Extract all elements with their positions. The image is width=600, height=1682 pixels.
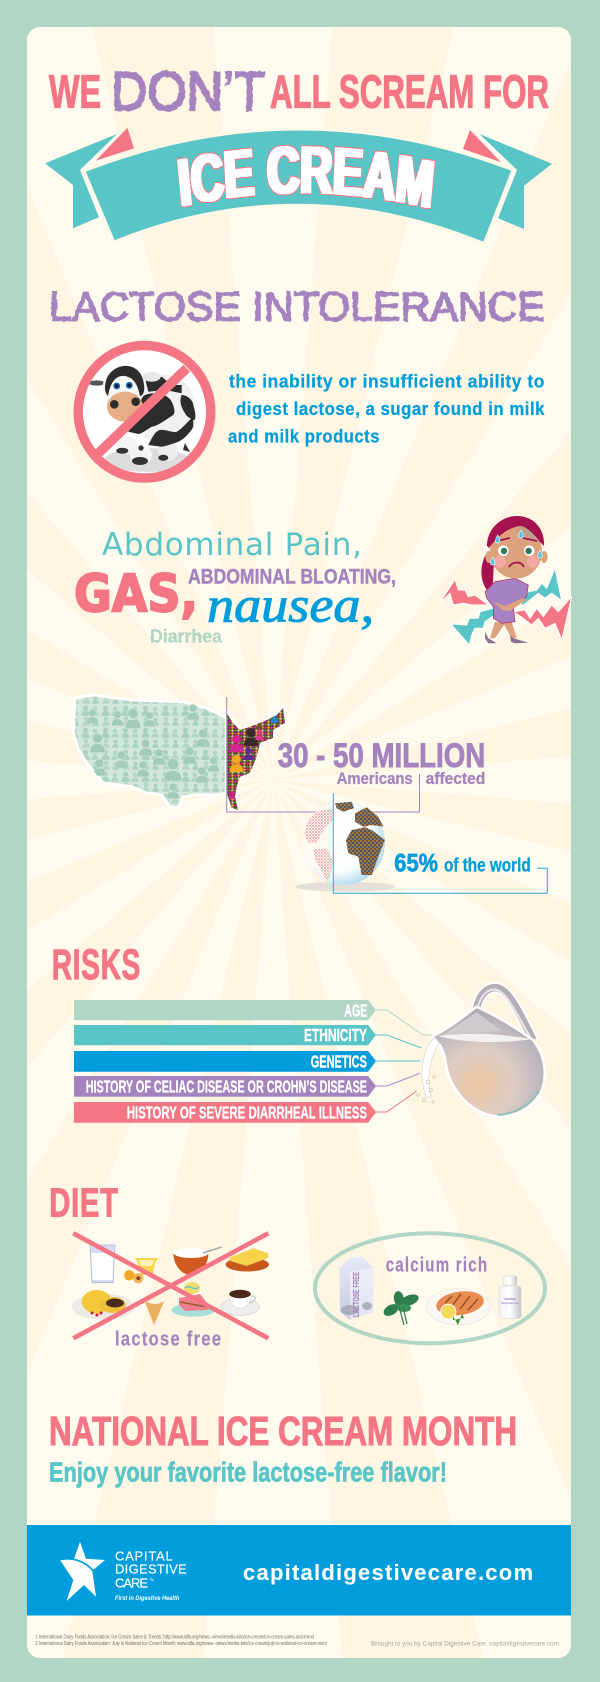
symptom: gas: GAS,	[74, 565, 198, 625]
map divider bracket	[227, 697, 420, 812]
definition line 1: the inability or insufficient ability to	[229, 370, 545, 391]
ribbon right tail	[480, 134, 552, 229]
jug base tint	[498, 1091, 539, 1115]
definition line 3: and milk products	[228, 425, 380, 446]
panel: calcium rich foods	[315, 1233, 545, 1343]
globe sphere	[302, 802, 385, 885]
pain zigzag: right pink	[513, 597, 572, 640]
brought to you by credit: Brought to you by Capital Digestive Care, capitaldigestivecare.com	[371, 1641, 559, 1648]
bar: severe diarrheal illness: HISTORY OF SEVERE DIARRHEAL ILLNESS	[127, 1103, 367, 1123]
heading: lactose intolerance: LACTOSE INTOLERANCE	[49, 284, 545, 330]
sweat drops	[490, 530, 542, 565]
legs	[490, 622, 517, 638]
europe and africa	[335, 802, 385, 875]
ribbon right fold	[463, 130, 501, 162]
food: lactose-free milk carton: LACTOSE FREE	[351, 1272, 361, 1317]
title word: we: WE	[49, 65, 101, 117]
symptom: abdominal bloating: ABDOMINAL BLOATING,	[188, 564, 396, 588]
bar: celiac or crohn's: HISTORY OF CELIAC DISEASE OR CROHN’S DISEASE	[86, 1077, 367, 1097]
subheading: enjoy your favorite flavor: Enjoy your favorite lactose-free flavor!	[49, 1457, 447, 1488]
shoes	[485, 632, 528, 643]
heading: diet: DIET	[49, 1180, 119, 1226]
symptom: abdominal pain: Abdominal Pain,	[102, 527, 362, 563]
title: we don't all scream for	[49, 60, 549, 122]
bar: age: AGE	[344, 1001, 367, 1021]
face	[490, 526, 542, 578]
bar: genetics	[74, 1051, 376, 1072]
food: waffle plate	[72, 1290, 135, 1320]
footnote 1: 1 International Dairy Foods Association: Ice Cream Sales & Trends; http://www.idfa.org/news--views/media-kits/ice-cream/ice-cream-sales-and-trend	[35, 1634, 314, 1640]
ribbon text: ICE CREAM	[176, 144, 436, 209]
food: cottage cheese bowl	[173, 1247, 222, 1275]
ears	[485, 551, 548, 563]
pain zigzag: left pink	[439, 579, 488, 605]
label: calcium rich: calcium rich	[386, 1255, 488, 1277]
icon: no cow sign	[78, 346, 211, 478]
cheeks	[494, 556, 506, 568]
ribbon left tail	[45, 134, 117, 228]
food: cake	[172, 1282, 215, 1317]
logo star	[60, 1542, 105, 1601]
food: lactase supplement bottle: Supplement	[501, 1301, 519, 1305]
stat label: of the world: of the world	[444, 856, 531, 877]
food: salmon plate	[427, 1288, 490, 1325]
risks bars	[74, 1000, 435, 1123]
bar: genetics: GENETICS	[311, 1051, 367, 1071]
footer background	[27, 1525, 571, 1616]
food: milk glass	[90, 1245, 115, 1283]
pain zigzag: upper teal	[521, 568, 562, 606]
jug neck highlight	[440, 1012, 502, 1036]
stat: americans affected	[278, 737, 485, 788]
logo wordmark: TM	[149, 1578, 154, 1582]
ribbon main band	[84, 129, 513, 243]
logo wordmark	[115, 1549, 187, 1602]
globe left faded veil	[302, 803, 333, 884]
sign ring	[78, 346, 211, 478]
food: spinach	[382, 1290, 420, 1325]
icon: globe	[295, 793, 547, 893]
pain zigzag: lower teal	[451, 608, 495, 645]
icon: woman with stomach ache	[439, 516, 572, 645]
cow	[89, 365, 196, 472]
definition line 2: digest lactose, a sugar found in milk	[236, 398, 545, 419]
footnote 2: 2 International Dairy Foods Association: July is National Ice Cream Month; www.idfa.org/news--views/media-kits/ice-cream/july-is-national-ice-cream-mon/	[35, 1641, 328, 1647]
sign background	[78, 346, 210, 478]
jug milk surface	[437, 1034, 533, 1042]
label: lactose free: lactose free	[115, 1329, 222, 1351]
icon: milk jug	[417, 988, 545, 1116]
logo wordmark: DIGESTIVE	[115, 1562, 187, 1577]
eyes	[498, 545, 509, 556]
jug body	[433, 1007, 545, 1116]
hair ponytail	[481, 551, 495, 593]
logo wordmark: First in Digestive Health	[115, 1595, 179, 1602]
bar: ethnicity: ETHNICITY	[304, 1025, 367, 1045]
milk splash	[417, 1076, 436, 1103]
ribbon left fold	[96, 128, 134, 161]
world bracket	[333, 793, 547, 893]
food: yogurt and peaches	[124, 1258, 158, 1284]
bar: ethnicity	[74, 1025, 376, 1045]
map: unaffected mint portion	[73, 695, 227, 808]
panel: foods to avoid	[72, 1233, 269, 1351]
stat label: affected: affected	[426, 770, 485, 788]
symptoms word cluster	[74, 527, 396, 646]
stat number: 30-50 million: 30 - 50 MILLION	[278, 737, 485, 775]
calcium oval	[315, 1233, 545, 1343]
title word: don't: DON’T	[111, 60, 265, 122]
definition text	[228, 370, 545, 446]
website url: capitaldigestivecare.com	[243, 1560, 533, 1585]
food: lactase supplement bottle	[499, 1276, 521, 1318]
food: hot chocolate	[221, 1290, 259, 1315]
ribbon banner: ice cream	[45, 128, 552, 242]
milk stream	[422, 1037, 439, 1097]
food: ice cream cone	[144, 1290, 166, 1325]
cross out	[73, 1233, 268, 1338]
usa map	[73, 695, 420, 812]
stat number: 65%: 65%	[394, 850, 438, 878]
food: lactase supplement bottle: Lactase	[504, 1297, 516, 1301]
logo wordmark: CAPITAL	[115, 1549, 173, 1564]
footnotes	[35, 1634, 328, 1647]
stat: world affected	[394, 850, 531, 878]
hands	[494, 598, 526, 611]
heading: risks: RISKS	[52, 942, 141, 989]
sign slash	[98, 368, 187, 453]
footer band	[27, 1525, 571, 1616]
globe shadow	[295, 882, 395, 892]
logo wordmark: CARE	[115, 1575, 148, 1590]
dress	[485, 578, 528, 623]
americas	[304, 808, 333, 882]
jug handle	[477, 988, 533, 1040]
symptom: diarrhea: Diarrhea	[150, 626, 223, 646]
food: butter dish	[226, 1248, 269, 1272]
bar: age	[74, 1000, 376, 1021]
eyebrows and mouth	[497, 538, 537, 567]
hair	[487, 516, 544, 548]
bar: severe diarrheal illness	[74, 1102, 376, 1123]
stat label: americans: Americans	[337, 770, 413, 788]
forehead shade	[518, 526, 540, 542]
symptom: nausea: nausea,	[207, 577, 374, 633]
connector lines	[376, 1010, 435, 1112]
map: affected colourful portion	[226, 705, 286, 811]
bar: celiac or crohn's	[74, 1076, 376, 1097]
food: lactose-free milk carton	[340, 1256, 373, 1320]
